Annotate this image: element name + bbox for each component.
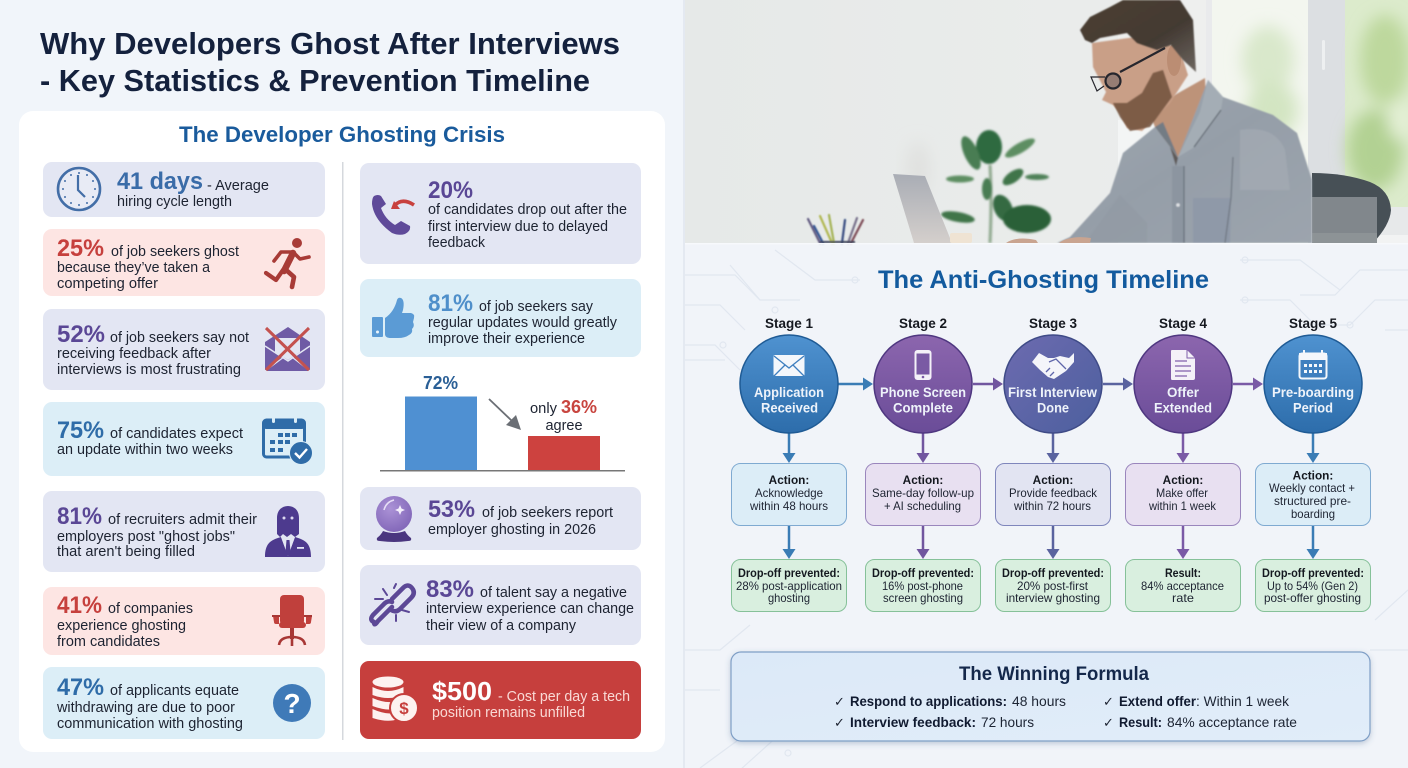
stat card: 41% companies: 41% (57, 592, 102, 619)
icon: envelope (774, 355, 804, 376)
outcome box: ghosting (768, 591, 810, 605)
connector arrows stage 2 (916, 378, 1003, 559)
stage 4: offer extended: Extended (1154, 400, 1212, 416)
stat card: 41 days: hiring cycle length (117, 194, 232, 210)
outcome box (996, 560, 1110, 612)
stat card: 83% negative experience: their view of a company (426, 618, 577, 634)
title: - Key Statistics & Prevention Timeline (40, 63, 590, 98)
stat card: 83% negative experience: of talent say a negative (480, 585, 627, 601)
stat card: 47% withdrawing: of applicants equate (110, 683, 239, 699)
action box: Make offer (1156, 486, 1208, 500)
stat card: 52% no feedback: interviews is most frustrating (57, 362, 241, 378)
man: beard (1113, 70, 1172, 131)
action box: within 48 hours (749, 499, 828, 513)
stage 1: application received: Received (761, 400, 818, 416)
stat card: 81% regular updates: 81% (428, 290, 473, 317)
icon: crossed envelope (265, 327, 310, 371)
stat card: $500 cost per day (360, 661, 641, 739)
stat card: 20% drop out: first interview due to delayed (428, 219, 608, 235)
stat card: 75% expect update (43, 402, 325, 476)
stat card: 81% regular updates: improve their experience (428, 331, 585, 347)
stat card: 75% expect update: of candidates expect (110, 426, 243, 442)
action box: Weekly contact + (1269, 481, 1355, 495)
action box: Action: (769, 473, 809, 487)
man: glasses (1091, 48, 1165, 91)
action box: structured pre- (1274, 494, 1351, 508)
icon: coins with dollar (372, 676, 418, 722)
stat card: 47% withdrawing (43, 667, 325, 739)
stat card: 47% withdrawing: communication with ghosting (57, 716, 243, 732)
outcome box: post-offer ghosting (1264, 591, 1361, 605)
bar: 36% (528, 436, 600, 470)
man: hair (1080, 0, 1196, 72)
outcome box: Drop-off prevented: (872, 566, 974, 580)
action box: Action: (1163, 473, 1203, 487)
stat card: 81% regular updates (360, 279, 641, 357)
formula item: feedback: ✓ (834, 716, 845, 731)
formula item: extend offer: Extend offer (1119, 693, 1197, 709)
stat card: $500 cost per day: $500 (432, 676, 492, 706)
stat card: 41 days: - Average (207, 178, 269, 194)
outcome box: 28% post-application (736, 579, 842, 593)
icon: clock (58, 168, 100, 210)
man: face (1092, 35, 1188, 131)
outcome box: Up to 54% (Gen 2) (1267, 579, 1358, 593)
stat card: 20% drop out (360, 163, 641, 264)
outcome box: Result: (1165, 566, 1201, 580)
action box: Action: (903, 473, 943, 487)
formula item: respond: 48 hours (1012, 693, 1066, 709)
stat card: 52% no feedback: of job seekers say not (110, 330, 249, 346)
formula item: respond: ✓ (834, 695, 845, 710)
outcome box: 84% acceptance (1141, 579, 1224, 593)
formula item: feedback (834, 714, 1034, 731)
action box: + AI scheduling (884, 499, 961, 513)
bar chart: 72% vs 36%: 72% (423, 373, 458, 393)
stat card: 25% competing offer (43, 229, 325, 296)
stat card: 53% employer ghosting: of job seekers report (482, 505, 613, 521)
stat card: 81% regular updates: of job seekers say (479, 299, 594, 315)
man: ear (1167, 44, 1181, 76)
icon: question mark (273, 684, 311, 722)
outcome box (732, 560, 846, 612)
panel heading: The Developer Ghosting Crisis (179, 122, 505, 147)
stage 2: phone screen complete (866, 316, 1003, 612)
outcome box: rate (1172, 591, 1194, 605)
stat card: 20% drop out: 20% (428, 177, 473, 204)
icon: smartphone (914, 350, 932, 380)
outcome box: Drop-off prevented: (1262, 566, 1364, 580)
stat card: 25% competing offer: competing offer (57, 276, 158, 292)
outcome box: interview ghosting (1006, 591, 1100, 605)
stat card: 41% companies: from candidates (57, 634, 160, 650)
outcome box: Drop-off prevented: (1002, 566, 1104, 580)
action box: Acknowledge (755, 486, 823, 500)
action box: Same-day follow-up (872, 486, 974, 500)
stat card: 53% employer ghosting: employer ghosting in 2026 (428, 522, 596, 538)
outcome box: 20% post-first (1017, 579, 1089, 593)
stat card: 20% drop out: of candidates drop out after the (428, 202, 627, 218)
stage 2: phone screen complete: Stage 2 (899, 316, 947, 331)
stat card: 20% drop out: feedback (428, 235, 486, 251)
photo: developer at laptop (685, 0, 1408, 243)
stage 4: offer extended (1126, 316, 1263, 612)
stat card: $500 cost per day: position remains unfilled (432, 705, 585, 721)
stage 3: first interview done (996, 316, 1133, 612)
stage 4: offer extended: Stage 4 (1159, 316, 1207, 331)
outcome box (1256, 560, 1370, 612)
chair (1312, 173, 1391, 243)
action box: within 72 hours (1013, 499, 1091, 513)
icon: office chair (272, 595, 312, 646)
action box (996, 464, 1110, 526)
stat card: 53% employer ghosting: 53% (428, 496, 475, 523)
formula item: result: ✓ (1103, 716, 1114, 731)
stat card: 47% withdrawing: withdrawing are due to poor (56, 700, 235, 716)
icon: calendar (1299, 350, 1327, 378)
man: hands (1006, 237, 1091, 243)
stat card: 41% companies: experience ghosting (57, 618, 186, 634)
stat card: 75% expect update: 75% (57, 417, 104, 444)
icon: calendar with check (263, 414, 312, 464)
action box (1126, 464, 1240, 526)
icon: question mark: ? (283, 688, 301, 719)
stat card: 25% competing offer: 25% (57, 235, 104, 262)
icon: crystal ball (376, 496, 412, 542)
stat card: 53% employer ghosting (360, 487, 641, 550)
stage 3: first interview done: First Interview (1008, 384, 1097, 400)
icon: document (1171, 350, 1195, 380)
stage 5: pre-boarding period: Pre-boarding (1272, 384, 1354, 400)
formula heading: The Winning Formula (959, 663, 1149, 685)
stat card: 81% ghost jobs: 81% (57, 503, 102, 530)
formula item: extend offer (1103, 693, 1290, 710)
action box: within 1 week (1148, 499, 1216, 513)
stat card: 75% expect update: an update within two weeks (57, 442, 233, 458)
stage 3: first interview done: Stage 3 (1029, 316, 1077, 331)
action box (1256, 464, 1370, 526)
icon: broken chain link (371, 584, 414, 624)
icon: ghost in a suit (265, 506, 311, 557)
action box (866, 464, 980, 526)
stat card: 41 days: 41 days (117, 168, 203, 195)
outcome box: screen ghosting (883, 591, 963, 605)
action box: Action: (1033, 473, 1073, 487)
connector arrows stage 4 (1176, 378, 1263, 559)
stat card: 81% ghost jobs: of recruiters admit their (108, 512, 257, 528)
stat card: 81% regular updates: regular updates would greatly (428, 315, 618, 331)
stage 4: offer extended: Offer (1167, 384, 1200, 400)
action box: boarding (1291, 507, 1335, 521)
bar: 72% (405, 396, 477, 470)
arrow: decline (489, 399, 521, 430)
stat card: 52% no feedback: 52% (57, 321, 105, 348)
formula item: result: 84% acceptance rate (1167, 714, 1297, 730)
panel: the winning formula (731, 652, 1370, 741)
connector arrows stage 1 (782, 378, 873, 559)
stage 5: pre-boarding period (1256, 316, 1370, 612)
stat card: 81% ghost jobs (43, 491, 325, 572)
laptop (893, 174, 952, 243)
stat card: 41% companies: of companies (108, 601, 193, 617)
stat card: 25% competing offer: because they’ve taken a (57, 260, 211, 276)
icon: coins with dollar: $ (399, 699, 409, 718)
stat card: 41% companies (43, 587, 325, 655)
connector arrows stage 5 (1306, 433, 1320, 559)
stage 2: phone screen complete: Complete (893, 400, 953, 416)
stage 1: application received: Stage 1 (765, 316, 813, 331)
icon: handshake (1032, 353, 1074, 379)
action box: Provide feedback (1009, 486, 1097, 500)
stat card: 83% negative experience: interview experience can change (426, 601, 634, 617)
bar chart: 72% vs 36%: agree (545, 418, 583, 434)
icon: thumbs up (372, 298, 414, 338)
bar chart: 72% vs 36%: only (530, 401, 558, 417)
stat card: 81% ghost jobs: that aren't being filled (57, 544, 195, 560)
stat card: 41 days (43, 162, 325, 217)
stage 5: pre-boarding period: Stage 5 (1289, 316, 1337, 331)
stat card: $500 cost per day: - Cost per day a tech (498, 689, 630, 705)
stat card: 52% no feedback (43, 309, 325, 390)
action box (732, 464, 846, 526)
outcome box: Drop-off prevented: (738, 566, 840, 580)
formula item: result (1103, 714, 1297, 731)
stage 5: pre-boarding period: Period (1293, 400, 1333, 416)
pencil cup (808, 215, 863, 243)
formula item: respond (834, 693, 1066, 710)
man: torso and arm (1057, 78, 1312, 243)
outcome box (1126, 560, 1240, 612)
title: Why Developers Ghost After Interviews (40, 26, 620, 61)
formula item: feedback: Interview feedback: (850, 714, 976, 730)
stat card: 52% no feedback: receiving feedback after (57, 346, 211, 362)
stat card: 81% ghost jobs: employers post "ghost jobs" (57, 529, 235, 545)
stage 1: application received: Application (754, 384, 824, 400)
timeline: anti-ghosting stages (732, 316, 1370, 612)
stage 2: phone screen complete: Phone Screen (880, 384, 966, 400)
icon: running person (266, 238, 309, 287)
formula item: extend offer: ✓ (1103, 695, 1114, 710)
bar chart: 72% vs 36% (380, 373, 625, 472)
stat card: 83% negative experience (360, 565, 641, 645)
outcome box (866, 560, 980, 612)
timeline heading: The Anti-Ghosting Timeline (878, 266, 1209, 294)
stat card: 47% withdrawing: 47% (57, 674, 104, 701)
icon: phone with red arrow (372, 195, 414, 235)
action box: Action: (1293, 468, 1333, 482)
formula item: extend offer: : Within 1 week (1196, 693, 1290, 709)
title (40, 26, 620, 98)
window (1118, 0, 1408, 243)
bar chart: 72% vs 36%: 36% (561, 397, 597, 417)
panel: the developer ghosting crisis (19, 111, 665, 752)
plant (940, 130, 1051, 243)
formula item: respond: Respond to applications: (850, 693, 1007, 709)
formula item: feedback: 72 hours (981, 714, 1034, 730)
stage 3: first interview done: Done (1037, 400, 1069, 416)
stage 1: application received (732, 316, 873, 612)
stat card: 25% competing offer: of job seekers ghost (111, 244, 239, 260)
stat card: 83% negative experience: 83% (426, 576, 474, 603)
connector arrows stage 3 (1046, 378, 1133, 559)
formula item: result: Result: (1119, 714, 1162, 730)
outcome box: 16% post-phone (882, 579, 963, 593)
